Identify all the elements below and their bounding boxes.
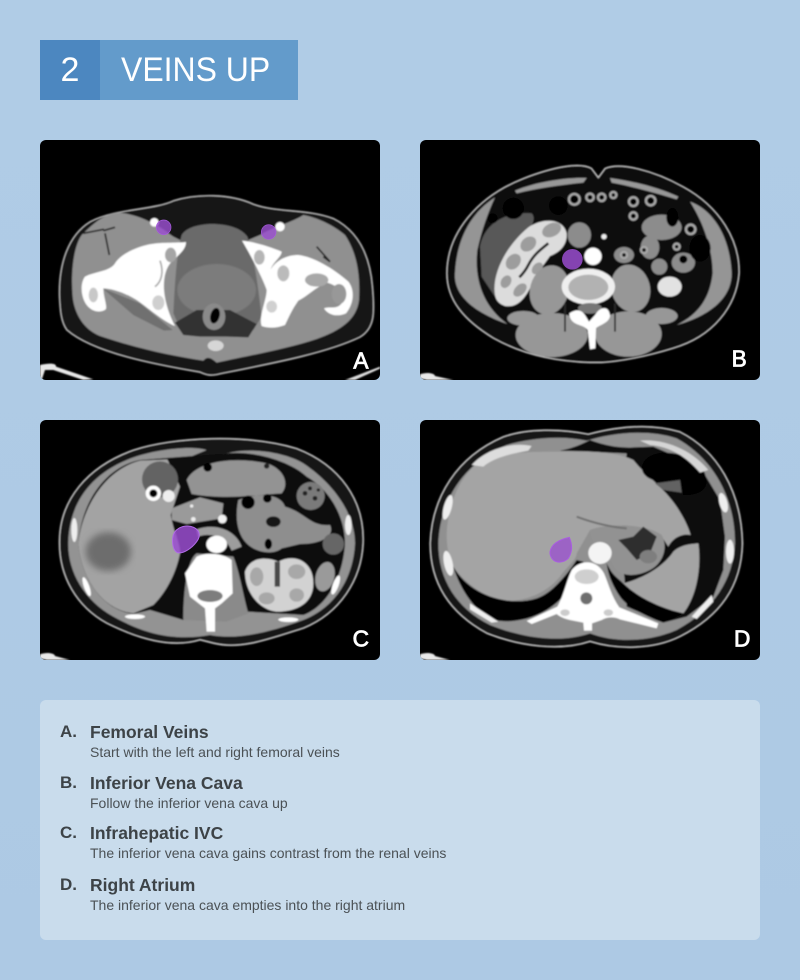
CT slice: kidney level [420, 165, 739, 380]
legend item D [60, 875, 405, 913]
panel: CT scan C, infrahepatic IVC [40, 420, 380, 660]
label B: B [732, 346, 747, 372]
legend item B: Follow the inferior vena cava up [90, 795, 288, 811]
panel: CT scan B, inferior vena cava [420, 140, 760, 380]
CT slice: pelvis [40, 196, 380, 380]
legend item D: Right Atrium [90, 875, 195, 895]
legend item B: B. [60, 773, 77, 792]
label D: D [734, 626, 750, 652]
title banner [40, 40, 298, 100]
highlight: inferior vena cava [562, 249, 583, 270]
highlight: right atrium [550, 537, 572, 562]
legend item B [60, 773, 288, 811]
section number [40, 40, 100, 100]
heading: VEINS UP [121, 51, 270, 89]
highlight: femoral veins [156, 220, 276, 239]
CT slice: liver and kidney level [40, 438, 363, 660]
legend item D: The inferior vena cava empties into the right atrium [90, 897, 405, 913]
legend item C: Infrahepatic IVC [90, 823, 223, 843]
legend item C: The inferior vena cava gains contrast from the renal veins [90, 845, 446, 861]
CT slice: upper abdomen [420, 427, 743, 660]
label C: C [353, 626, 369, 652]
highlight: infrahepatic IVC [173, 526, 199, 553]
legend item A: Femoral Veins [90, 722, 209, 742]
panel: legend [40, 700, 760, 940]
legend item A: A. [60, 722, 77, 741]
legend item A [60, 722, 340, 760]
legend item B: Inferior Vena Cava [90, 773, 243, 793]
legend item D: D. [60, 875, 77, 894]
legend item C: C. [60, 823, 77, 842]
panel: CT scan D, right atrium [420, 420, 760, 660]
legend item A: Start with the left and right femoral veins [90, 744, 340, 760]
section number: 2 [61, 51, 79, 89]
label A: A [353, 348, 369, 374]
legend item C [60, 823, 446, 861]
panel: CT scan A, femoral veins [40, 140, 380, 380]
